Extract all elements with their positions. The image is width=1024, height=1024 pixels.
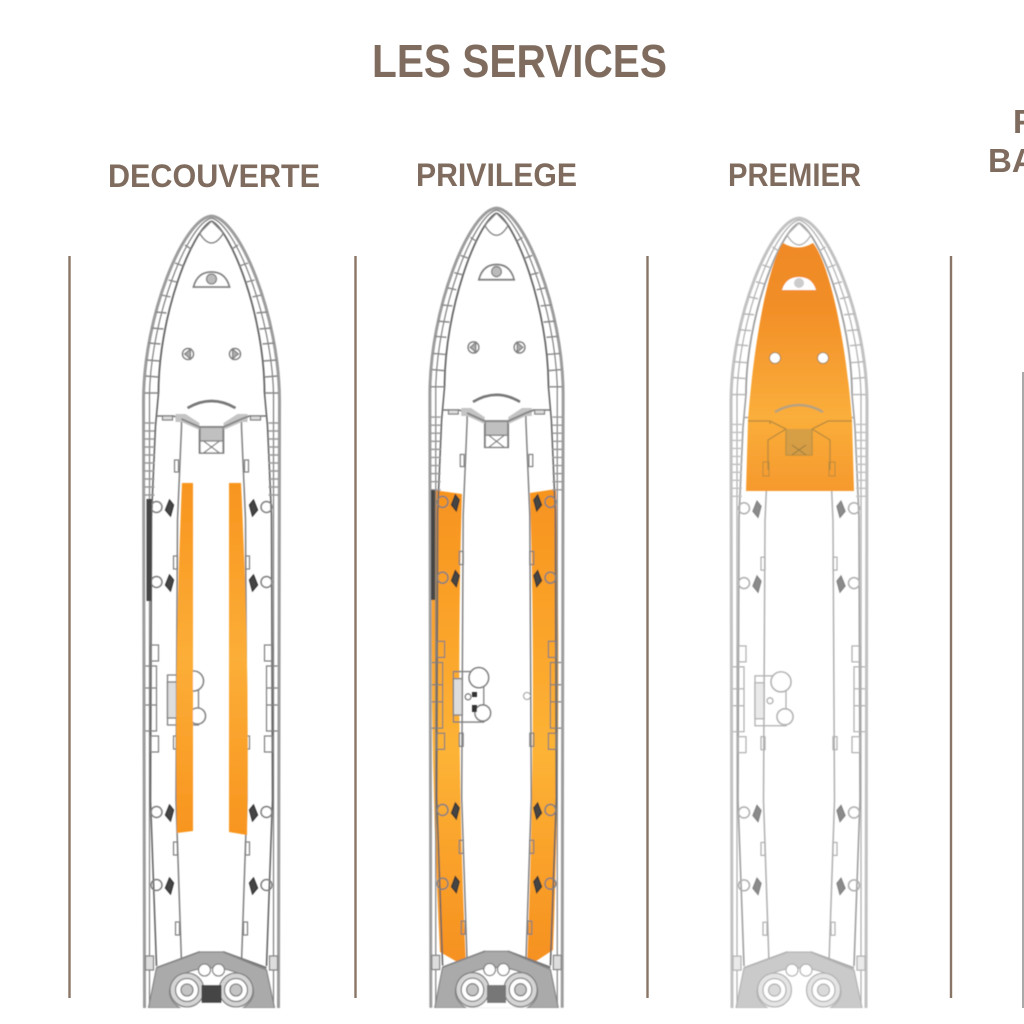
heading: cropped fourth service [988,103,1024,179]
orange zone: front deck [746,243,854,491]
title: LES SERVICES [372,35,667,87]
dark side rail [431,490,435,600]
ship outline [430,208,563,1016]
vertical separators [70,256,951,998]
cabin equipment [472,692,530,712]
heading: premier: PREMIER [728,157,861,193]
orange zone: right strip [229,483,248,835]
panel: decouverte deck plan [144,216,280,1016]
orange zone: side bands [432,489,558,967]
panel: premier deck plan [731,218,867,1016]
heading: decouverte: DECOUVERTE [108,158,320,194]
stern hatch [202,985,222,1003]
dark side rail [146,499,152,601]
orange zone: left strip [176,483,193,833]
heading: privilege: PRIVILEGE [416,157,577,193]
front deck details [748,277,852,476]
panel: privilege deck plan [430,208,563,1016]
stern hatch [487,985,506,1003]
cropped fourth ship edge [1022,372,1024,1008]
